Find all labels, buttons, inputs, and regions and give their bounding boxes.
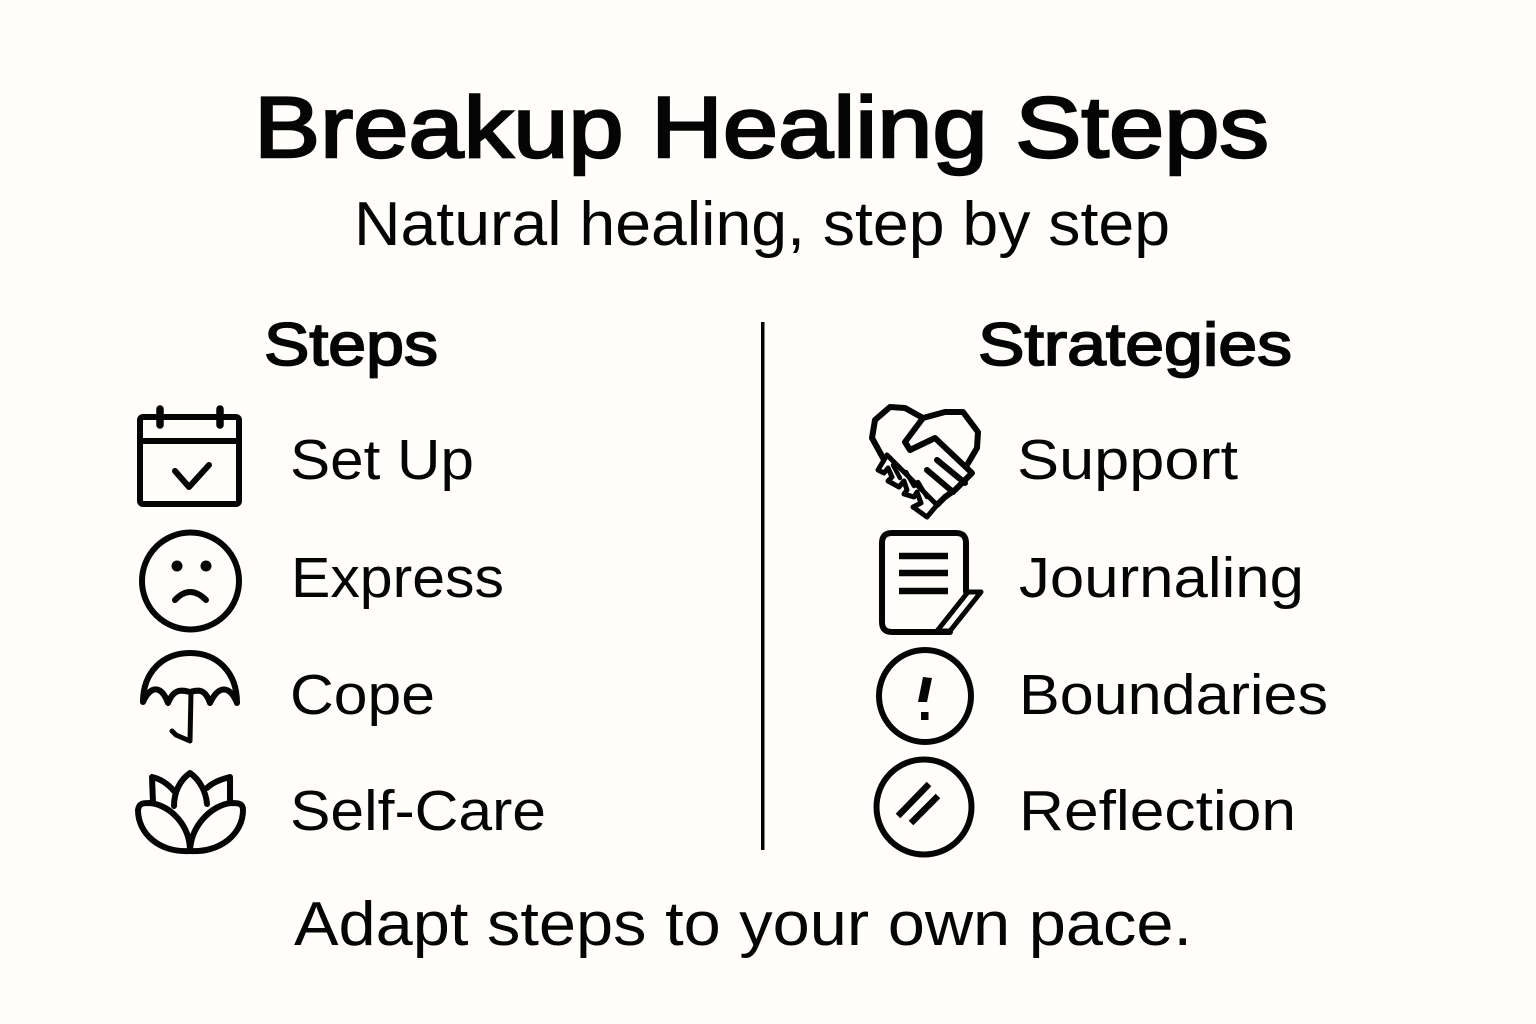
subtitle: Natural healing, step by step xyxy=(354,190,1170,259)
label: reflection: Reflection xyxy=(1019,779,1296,843)
icon: umbrella xyxy=(143,653,237,741)
title: Breakup Healing Steps xyxy=(254,80,1269,176)
icon: lotus xyxy=(138,773,243,851)
label: express: Express xyxy=(291,546,504,610)
column divider xyxy=(761,322,764,850)
label: support: Support xyxy=(1017,428,1238,492)
column heading: steps: Steps xyxy=(264,311,438,378)
column heading: strategies: Strategies xyxy=(978,311,1292,378)
icon: calendar with check xyxy=(140,409,239,504)
icon: slashes circle xyxy=(876,760,972,854)
label: cope: Cope xyxy=(290,663,435,727)
label: set up: Set Up xyxy=(290,428,474,492)
icon: journal page xyxy=(882,533,981,632)
icon: exclamation circle xyxy=(879,650,971,742)
label: journaling: Journaling xyxy=(1019,546,1304,610)
label: boundaries: Boundaries xyxy=(1019,663,1328,727)
footer note: Adapt steps to your own pace. xyxy=(294,890,1192,959)
icon: heart handshake xyxy=(872,407,978,517)
icon: sad face xyxy=(142,532,239,630)
label: self-care: Self-Care xyxy=(290,779,546,843)
